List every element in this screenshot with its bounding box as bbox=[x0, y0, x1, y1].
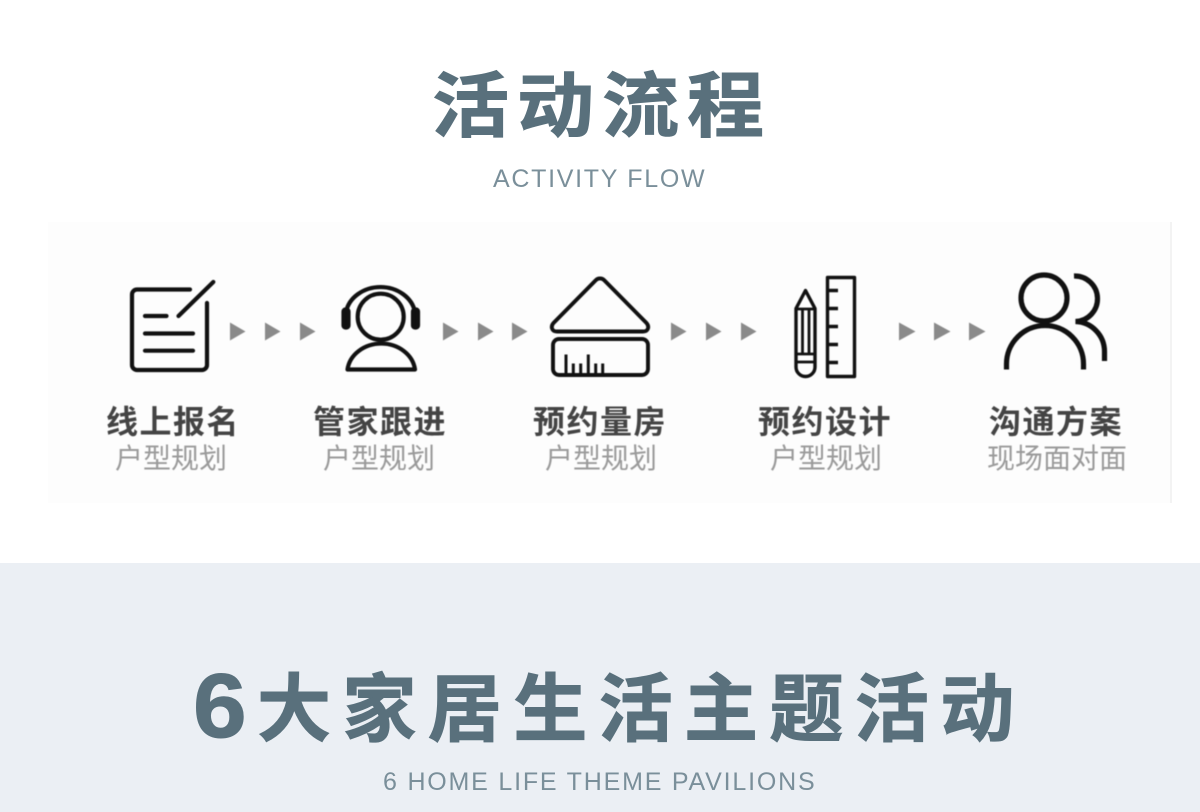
step 1 sublabel: 户型规划 bbox=[115, 443, 227, 474]
step 4 label: 预约设计 bbox=[758, 404, 892, 440]
panel: theme pavilions bbox=[0, 563, 1200, 812]
heading: six: 6 bbox=[193, 656, 247, 757]
step 2 sublabel: 户型规划 bbox=[323, 443, 435, 474]
step 3 sublabel: 户型规划 bbox=[545, 443, 657, 474]
step 3 label: 预约量房 bbox=[533, 404, 667, 440]
subtitle: ACTIVITY FLOW bbox=[493, 165, 706, 193]
title: 活动流程 bbox=[432, 68, 772, 147]
step 1 label: 线上报名 bbox=[106, 404, 240, 440]
step 5 label: 沟通方案 bbox=[989, 404, 1123, 440]
panel: activity flow steps bbox=[48, 222, 1172, 503]
heading: themes: 大家居生活主题活动 bbox=[257, 668, 1026, 751]
step 5 sublabel: 现场面对面 bbox=[987, 443, 1127, 474]
step 4 sublabel: 户型规划 bbox=[770, 443, 882, 474]
step 2 label: 管家跟进 bbox=[313, 404, 447, 440]
subtitle: themes: 6 HOME LIFE THEME PAVILIONS bbox=[383, 768, 816, 796]
